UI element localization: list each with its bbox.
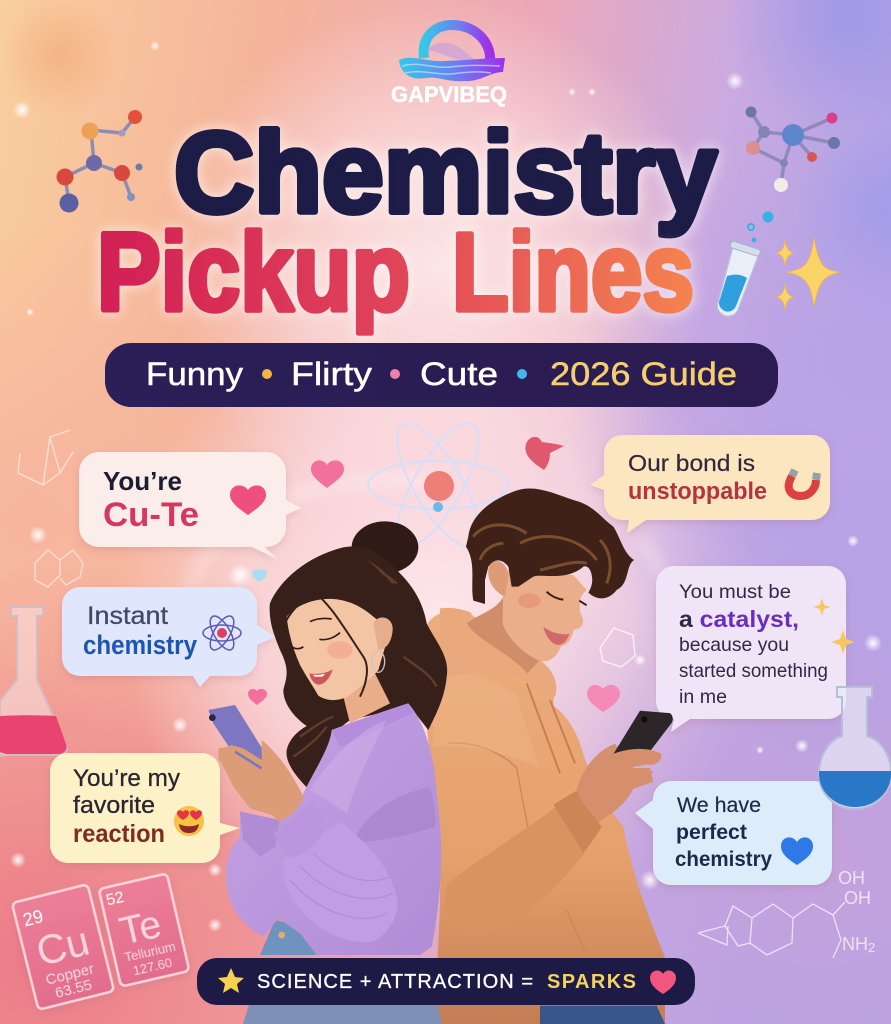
- bubble: Instant chemistry: chemistry: [83, 630, 197, 660]
- girl phone: [208, 705, 268, 770]
- boy hoodie body: [426, 610, 665, 1024]
- banner words: Cute: [420, 356, 498, 392]
- bubble: Our bond is unstoppable: unstoppable: [628, 478, 767, 505]
- boy neck: [467, 597, 540, 677]
- bubble: catalyst: in me: [679, 686, 727, 708]
- bottom bar: SPARKS: [547, 971, 636, 993]
- boy ear: [488, 561, 508, 597]
- bubble: catalyst: [656, 566, 846, 732]
- hearts background: [248, 437, 620, 712]
- banner words: Funny: [146, 356, 243, 392]
- bubble: We have perfect chemistry: perfect: [676, 820, 747, 844]
- icon: test tube: [717, 212, 774, 316]
- chemical formula labels: OH: [838, 868, 865, 888]
- sweater collar: [332, 703, 413, 747]
- boy fingers: [610, 749, 662, 785]
- title: Pickup Lines: [97, 211, 694, 334]
- girl near cuff: [273, 802, 328, 858]
- periodic tile: Te: [99, 873, 189, 987]
- decorative line molecules: [18, 430, 845, 958]
- chemical formula labels: NH: [842, 934, 868, 954]
- icon: heart eyes emoji: [174, 806, 204, 836]
- logo: [391, 25, 507, 107]
- bubble: We have perfect chemistry: We have: [677, 793, 761, 817]
- left flask: [0, 607, 67, 756]
- illustration: girl: [208, 521, 447, 1024]
- periodic tile: Te: 127.60: [131, 955, 173, 978]
- bubble: You're my favorite reaction: favorite: [73, 792, 155, 819]
- title: Chemistry: Chemistry: [174, 110, 717, 237]
- bubble: You're my favorite reaction: You’re my: [73, 765, 180, 792]
- bubble: Instant chemistry: [62, 587, 275, 687]
- molecule right: [746, 106, 840, 192]
- icon: sparkles: [776, 237, 841, 310]
- periodic tile: Cu: 29: [21, 906, 45, 930]
- girl earring: [372, 651, 385, 672]
- bubble: You're Cu-Te: You’re: [103, 466, 182, 496]
- bubble: You're my favorite reaction: [50, 753, 240, 863]
- title: Pickup Lines: Lines: [452, 211, 694, 334]
- boy phone: [613, 711, 673, 765]
- boy drawstrings: [527, 683, 575, 773]
- chemical formula labels: 2: [868, 940, 875, 955]
- bubble: You're Cu-Te: [79, 452, 301, 559]
- right flask: [819, 687, 891, 809]
- boy hood: [440, 608, 556, 704]
- bubble: Instant chemistry: Instant: [87, 602, 168, 630]
- sweater fold shadow: [353, 787, 435, 843]
- banner words: Flirty: [291, 356, 372, 392]
- bar text: SCIENCE + ATTRACTION =: [257, 971, 533, 993]
- periodic tile: Te: 52: [105, 889, 126, 909]
- icon: atom centre: [368, 412, 508, 558]
- periodic tile: Cu: [12, 884, 114, 1010]
- bubble: catalyst: You must be: [679, 581, 791, 603]
- girl hand: [218, 740, 303, 822]
- periodic tile: Cu: 63.55: [53, 976, 94, 1002]
- chemical formula labels: OH: [844, 888, 871, 908]
- boy sleeve: [445, 791, 602, 935]
- swirl: [190, 479, 673, 710]
- molecule left: [56, 110, 142, 212]
- bubble: catalyst: started something: [679, 660, 828, 682]
- girl ear: [373, 618, 393, 650]
- bottom bar: [197, 958, 695, 1005]
- bubble: We have perfect chemistry: [635, 781, 832, 885]
- girl sweater: [226, 703, 441, 955]
- bubble: Our bond is unstoppable: [590, 435, 830, 533]
- banner words: 2026 Guide: [550, 356, 737, 392]
- sweater highlight: [310, 720, 387, 813]
- boy face: [503, 570, 587, 661]
- bubble: catalyst: because you: [679, 634, 789, 656]
- illustration: boy: [426, 488, 673, 1024]
- girl far cuff: [240, 812, 280, 857]
- icon: bubble sparkles: [813, 598, 855, 654]
- girl bun: [352, 521, 418, 573]
- icon: magnet: [789, 470, 817, 496]
- chemical formula labels: [838, 868, 875, 955]
- girl sleeve: [283, 822, 397, 942]
- bubble: We have perfect chemistry: chemistry: [675, 847, 772, 871]
- bubble: catalyst: a catalyst,: [679, 606, 799, 632]
- girl hair back: [270, 546, 447, 787]
- girl jeans: [260, 920, 317, 955]
- girl face: [287, 599, 390, 700]
- boy hair: [466, 488, 634, 604]
- boy hand: [577, 744, 653, 822]
- girl jeans below bar: [243, 995, 442, 1024]
- bubble: You're my favorite reaction: reaction: [73, 820, 165, 848]
- periodic tile: Cu: Copper: [44, 960, 96, 989]
- icon: star: [218, 968, 244, 993]
- boy jeans: [540, 1006, 665, 1024]
- logo wordmark: GAPVIBEQ: [391, 82, 507, 107]
- girl hair front: [270, 547, 397, 667]
- title: Pickup Lines: Pickup: [97, 211, 410, 334]
- bubble: Our bond is unstoppable: Our bond is: [628, 450, 755, 476]
- girl neck: [343, 670, 390, 723]
- bubble: You're Cu-Te: Cu-Te: [103, 496, 199, 534]
- boy cuff: [553, 791, 602, 853]
- periodic tile: Te: Tellurium: [123, 939, 177, 965]
- icon: heart: [650, 971, 676, 994]
- icon: atom small: [203, 613, 241, 653]
- periodic tile: Te: Te: [116, 903, 165, 954]
- periodic tile: Cu: Cu: [32, 917, 94, 975]
- banner words: [146, 356, 737, 392]
- banner pill: [105, 343, 778, 407]
